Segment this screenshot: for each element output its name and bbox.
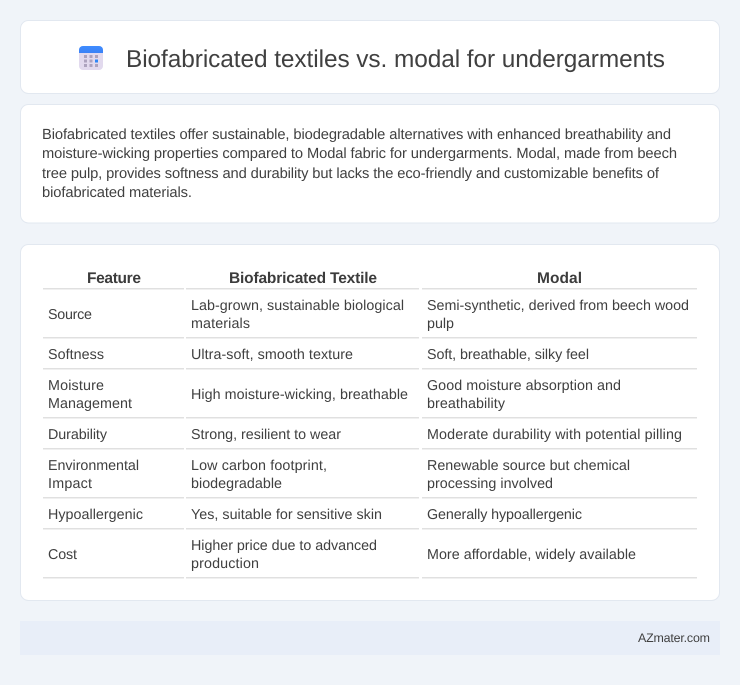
heading: Biofabricated textiles vs. modal for undergarments xyxy=(126,46,665,73)
row: cost: More affordable, widely available xyxy=(427,547,636,563)
text block: summary paragraph: biofabricated materials. xyxy=(42,185,192,201)
text block: summary paragraph: moisture-wicking properties compared to Modal fabric for undergarments. Modal, made from beech xyxy=(42,146,677,162)
text block: summary paragraph: tree pulp, provides softness and durability but lacks the eco-friendly and customizable benefits of xyxy=(42,166,660,182)
row: cost: Cost xyxy=(48,547,77,563)
row: source: Semi-synthetic, derived from beech wood xyxy=(427,298,689,314)
row: cost: Higher price due to advanced xyxy=(191,538,377,554)
row: softness xyxy=(43,347,697,370)
row: cost: production xyxy=(191,556,259,572)
row: environmental impact: processing involved xyxy=(427,476,553,492)
row: source: Source xyxy=(48,307,92,323)
row: source: materials xyxy=(191,316,250,332)
row: hypoallergenic: Hypoallergenic xyxy=(48,507,143,523)
row: moisture management: High moisture-wicking, breathable xyxy=(191,387,408,403)
panel: comparison table xyxy=(20,244,720,600)
row: moisture management: Good moisture absorption and xyxy=(427,378,621,394)
table header: Biofabricated Textile xyxy=(229,270,377,287)
row: environmental impact: Renewable source but chemical xyxy=(427,458,630,474)
row: environmental impact xyxy=(43,458,697,498)
table header: Feature xyxy=(87,270,141,287)
row: hypoallergenic: Yes, suitable for sensitive skin xyxy=(191,507,382,523)
row: durability xyxy=(43,427,697,450)
footer xyxy=(20,621,720,655)
row: moisture management: Moisture xyxy=(48,378,104,394)
row: environmental impact: Environmental xyxy=(48,458,139,474)
row: durability: Moderate durability with potential pilling xyxy=(427,427,682,443)
row: softness: Ultra-soft, smooth texture xyxy=(191,347,353,363)
row: environmental impact: Impact xyxy=(48,476,92,492)
panel: title xyxy=(20,20,720,94)
row: source: Lab-grown, sustainable biological xyxy=(191,298,404,314)
row: moisture management xyxy=(43,378,697,418)
row: source xyxy=(43,298,697,338)
row: moisture management: breathability xyxy=(427,396,506,412)
row: environmental impact: Low carbon footprint, xyxy=(191,458,327,474)
footer: AZmater.com xyxy=(638,631,710,645)
icon: calendar xyxy=(79,46,103,70)
text block: summary paragraph: Biofabricated textiles offer sustainable, biodegradable alternatives with enhanced breathability and xyxy=(42,127,671,143)
row: moisture management: Management xyxy=(48,396,132,412)
row: durability: Durability xyxy=(48,427,108,443)
table header xyxy=(43,270,697,290)
row: durability: Strong, resilient to wear xyxy=(191,427,341,443)
row: hypoallergenic xyxy=(43,507,697,530)
panel: summary xyxy=(20,104,720,223)
row: softness: Soft, breathable, silky feel xyxy=(427,347,589,363)
row: environmental impact: biodegradable xyxy=(191,476,282,492)
table header: Modal xyxy=(537,270,582,287)
row: softness: Softness xyxy=(48,347,104,363)
row: cost xyxy=(43,538,697,578)
row: source: pulp xyxy=(427,316,454,332)
row: hypoallergenic: Generally hypoallergenic xyxy=(427,507,582,523)
text block: summary paragraph xyxy=(42,127,677,201)
